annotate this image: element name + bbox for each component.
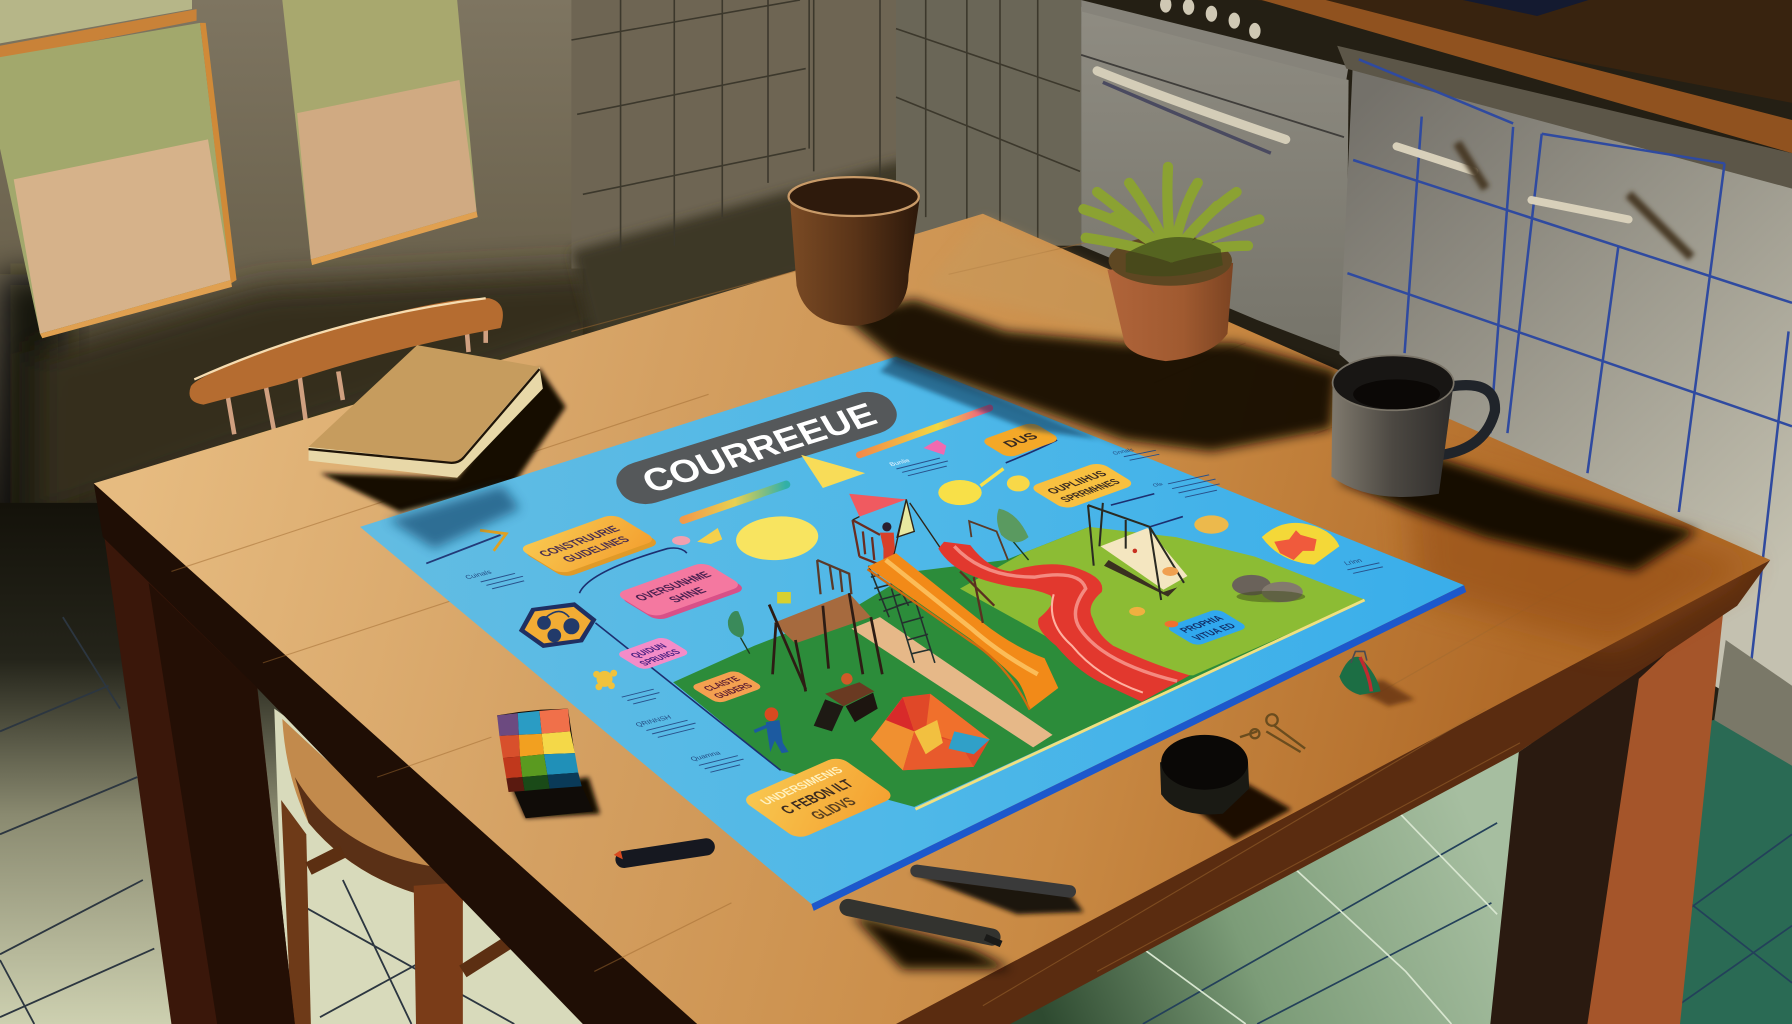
note block one: Cuinals <box>463 568 494 581</box>
yellow label: OUPLIIHUS <box>1043 469 1110 496</box>
notebook shadow <box>320 368 566 512</box>
playfield green <box>673 527 1366 807</box>
child figure <box>754 707 789 753</box>
title banner: COURREEUE <box>636 397 883 500</box>
rocks <box>1232 575 1305 602</box>
large orange label: GLIDVS <box>807 795 861 822</box>
blue label: VITUA ED <box>1190 622 1239 642</box>
note block three: Gnnals <box>1111 447 1135 456</box>
table legs <box>103 526 1725 1024</box>
note block seven <box>633 709 699 740</box>
yellow label: SPRRMHNES <box>1057 477 1124 504</box>
child on tower <box>880 522 895 566</box>
small pink label <box>615 636 691 671</box>
note block eight: Quamna <box>688 749 723 763</box>
floor tiles right <box>983 720 1792 1024</box>
note block three <box>1111 443 1159 462</box>
wooden platform <box>769 560 882 691</box>
top orange label <box>980 422 1061 458</box>
note block six <box>622 689 663 705</box>
table apron <box>94 483 1770 1024</box>
blue label: PROPHIA <box>1178 615 1227 635</box>
small picnic table <box>814 673 878 731</box>
red slide <box>938 521 1190 702</box>
blue label <box>1165 609 1249 646</box>
large orange label: UNDERSIMENIS <box>757 765 846 807</box>
coffee cup <box>789 177 920 326</box>
pen one <box>910 871 1083 914</box>
origami tent <box>871 694 990 770</box>
small pink label: SPRUNGS <box>637 648 684 668</box>
flower icon <box>593 670 617 690</box>
notebook <box>309 345 543 478</box>
top triangle and shapes <box>672 408 1229 563</box>
orange label: CONSTRUURIE <box>535 524 623 559</box>
pen shadow <box>851 914 1011 969</box>
wall tiles <box>571 0 1081 343</box>
arrow <box>426 530 506 563</box>
yellow border line <box>915 600 1365 809</box>
connector lines <box>579 440 1183 770</box>
note block two <box>888 450 951 477</box>
chair <box>189 298 526 1024</box>
small pink label: QUIDUN <box>628 642 670 660</box>
large orange label <box>740 756 896 840</box>
note block eight <box>688 745 747 774</box>
keychain pouch <box>1339 651 1381 695</box>
counter and cabinet <box>1257 0 1792 777</box>
orange slide <box>867 553 1058 710</box>
window panes <box>0 0 478 338</box>
sand path <box>851 617 1053 747</box>
floor tiles left <box>0 503 709 1024</box>
climbing ladders <box>869 560 935 663</box>
note block four <box>1152 471 1224 501</box>
orange label: GUIDELINES <box>559 534 633 564</box>
note block two: Bunlie <box>888 458 912 468</box>
note block four: Ola <box>1152 482 1165 488</box>
flag tower <box>849 494 949 566</box>
note block five <box>1340 554 1383 574</box>
grass orange label: CLAISTE <box>701 675 743 693</box>
trees <box>728 509 1029 654</box>
table top <box>94 214 1770 1024</box>
potted fern <box>1083 167 1259 361</box>
oven <box>1081 0 1349 354</box>
hexagon badge <box>519 602 597 648</box>
note block five: Lrinn <box>1342 557 1364 567</box>
pink label: OVERSUNHME <box>631 569 715 603</box>
poster <box>360 357 1466 911</box>
top orange label: DUS <box>1000 431 1043 450</box>
note block seven: QRINNSH <box>633 713 673 728</box>
grass orange label: GUIDERS <box>711 682 756 700</box>
yellow label <box>1028 462 1136 510</box>
large orange label: C FEBON ILT <box>777 777 858 817</box>
grass orange label <box>690 670 764 704</box>
swing set <box>1088 503 1189 600</box>
note block one <box>463 562 526 592</box>
dark mug <box>1331 355 1495 497</box>
crayon <box>614 847 706 859</box>
color block <box>497 709 593 818</box>
black lid <box>1160 735 1249 814</box>
orange label <box>517 514 662 578</box>
pink label <box>614 562 748 621</box>
keys <box>1240 714 1305 752</box>
pink label: SHINE <box>665 585 710 605</box>
pen two <box>848 907 1001 944</box>
red and yellow badge <box>1262 523 1339 565</box>
cast shadows across poster and table <box>389 299 1697 840</box>
ball markers <box>1129 607 1178 627</box>
lime lawn <box>960 527 1366 675</box>
